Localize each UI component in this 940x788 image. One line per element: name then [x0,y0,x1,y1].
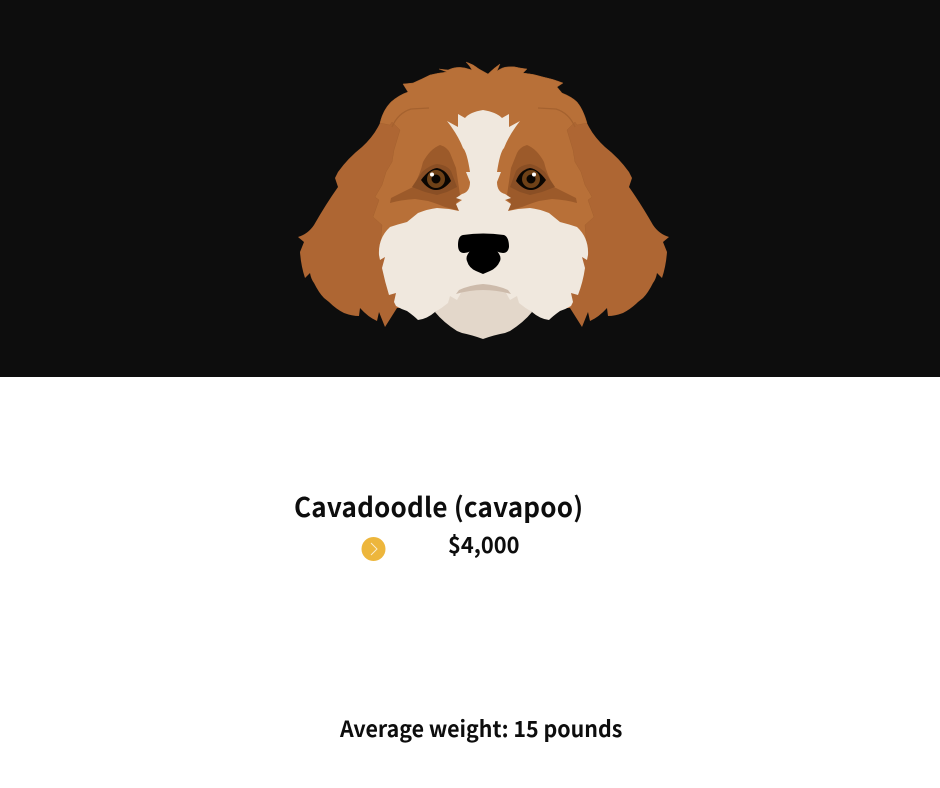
icon: arrow button [362,537,386,561]
price: $4,000 [448,528,519,560]
mouth shadow [456,284,511,294]
white blaze and muzzle [379,110,588,320]
ear fold lines [392,108,575,127]
average weight: Average weight: 15 pounds [340,712,622,744]
panel: dog illustration banner [0,0,940,377]
heading: breed name: Cavadoodle (cavapoo) [294,486,583,525]
nose [458,234,509,274]
left eye patch [390,145,462,211]
right eye [516,168,546,190]
head fur [373,62,594,250]
left eye [421,168,451,190]
chin [435,287,532,339]
dog ears and head silhouette [298,62,669,327]
icon: dog head [298,62,669,339]
right eye patch [505,145,577,211]
